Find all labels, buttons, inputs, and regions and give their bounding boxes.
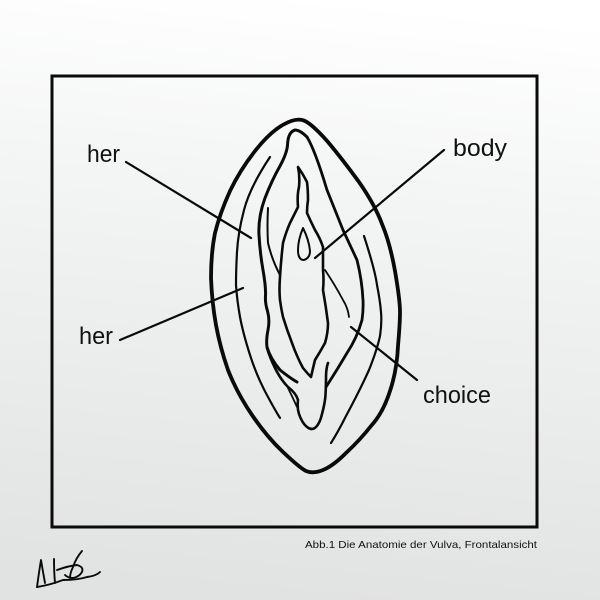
caption: Abb.1 Die Anatomie der Vulva, Frontalansicht (305, 539, 537, 551)
central opening (280, 167, 328, 377)
leader line: her upper (126, 162, 251, 238)
figure frame (52, 76, 537, 527)
small lower fold (288, 388, 297, 407)
teardrop (298, 228, 310, 260)
anatomical line drawing (211, 120, 400, 472)
label: her lower: her (79, 323, 113, 350)
left inner fold (268, 208, 280, 275)
label: her upper: her (87, 141, 120, 168)
left thin fold (236, 157, 280, 418)
leader line: choice (351, 327, 417, 380)
inner outline right (307, 137, 363, 387)
label: body: body (453, 135, 507, 162)
leader line: her lower (120, 288, 243, 340)
leader line: body (315, 150, 444, 258)
right thin fold (331, 236, 381, 443)
right inner fold (325, 270, 349, 317)
label: choice: choice (423, 382, 491, 409)
inner outline (259, 130, 307, 382)
signature (37, 551, 100, 587)
outer outline (211, 120, 400, 472)
lower central loop (267, 348, 328, 429)
